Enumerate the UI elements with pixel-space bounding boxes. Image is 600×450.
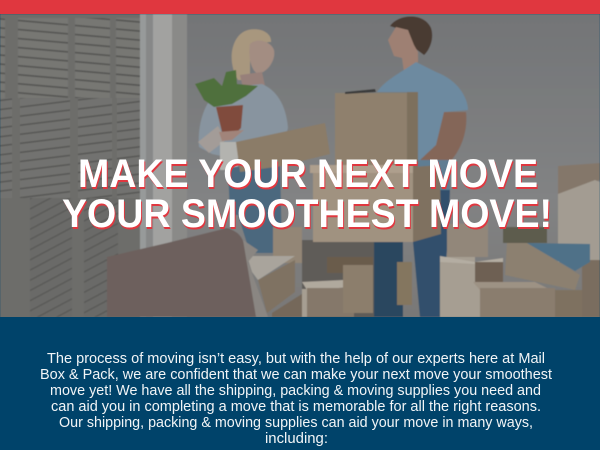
intro paragraph: Our shipping, packing & moving supplies can aid your move in many ways, [59, 414, 533, 431]
box lower front [310, 165, 441, 242]
intro paragraph: move yet! We have all the shipping, packing & moving supplies you need and [50, 382, 541, 399]
icon: potted plant [195, 70, 258, 141]
box held by man [335, 89, 418, 169]
window column [140, 14, 146, 318]
intro paragraph: including: [265, 430, 328, 447]
blanket over chair [107, 228, 258, 317]
boxes right [440, 163, 600, 317]
boxes left of man [247, 227, 412, 317]
woman [198, 29, 288, 253]
man [373, 16, 468, 317]
intro paragraph: can aid you in completing a move that is memorable for all the right reasons. [51, 398, 541, 415]
body panel background [0, 317, 600, 450]
wall [0, 14, 600, 318]
photo: couple moving with boxes [0, 14, 600, 318]
white shutters [0, 14, 145, 318]
title [62, 152, 553, 238]
title: MAKE YOUR NEXT MOVE [78, 152, 538, 196]
box held by woman [236, 123, 330, 172]
top red bar [0, 0, 600, 14]
intro paragraph: The process of moving isn’t easy, but with the help of our experts here at Mail [47, 350, 545, 367]
floor and curtain behind boxes [302, 240, 374, 318]
intro paragraph: Box & Pack, we are confident that we can make your next move your smoothest [40, 366, 553, 383]
title: MAKE YOUR NEXT MOVE [79, 154, 539, 198]
title: YOUR SMOOTHEST MOVE! [63, 194, 553, 238]
title: YOUR SMOOTHEST MOVE! [62, 192, 552, 236]
intro paragraph [40, 350, 553, 447]
